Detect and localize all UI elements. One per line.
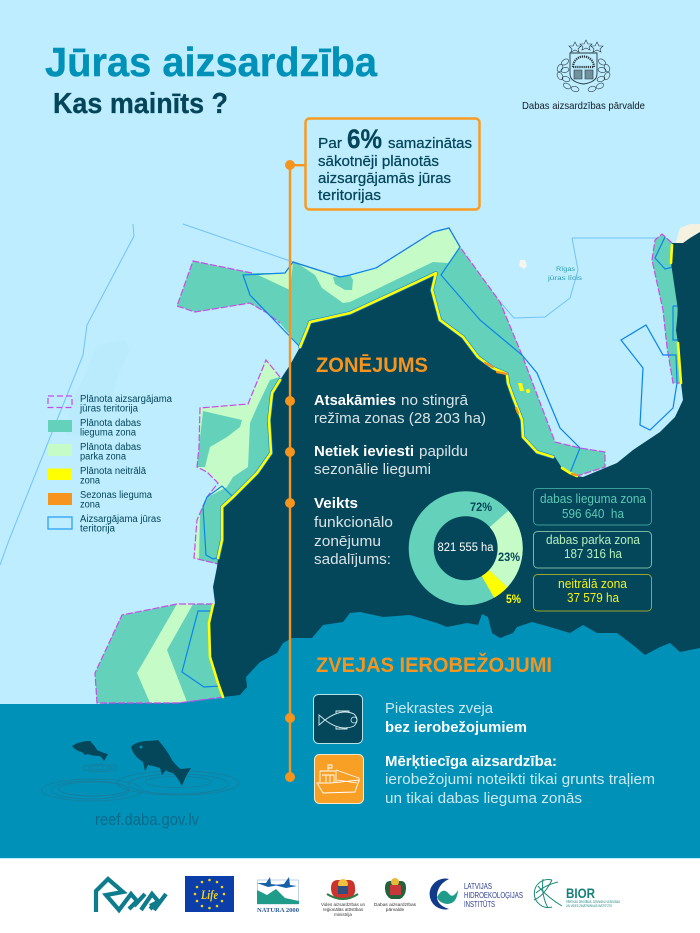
legend: Plānota dabas bbox=[80, 442, 141, 453]
logo: Latvian Institute of Aquatic Ecology: HIDROEKOLOĢIJAS bbox=[464, 891, 523, 900]
open sea band bbox=[0, 600, 700, 858]
logo: BIOR: BIOR bbox=[566, 885, 595, 901]
island bbox=[519, 260, 527, 269]
stat box: nature reserve zone: 596 640 ha bbox=[562, 507, 624, 521]
legend: zona bbox=[80, 476, 100, 486]
legend: Plānota neitrālā bbox=[80, 466, 146, 477]
map: neutral zone spots bbox=[518, 383, 530, 393]
callout: 6% reduction bbox=[306, 118, 480, 210]
callout: 6% reduction: 6% bbox=[347, 124, 382, 154]
map: dashed planned boundary bbox=[95, 228, 682, 703]
land mass bbox=[209, 232, 700, 697]
text: functional zoning: sadalījums: bbox=[314, 551, 391, 568]
legend: parka zona bbox=[80, 452, 126, 462]
timeline spine with dots bbox=[285, 160, 305, 782]
cream coast at north-east corner bbox=[675, 224, 700, 246]
text: coastal fishing: bez ierobežojumiem bbox=[385, 719, 527, 736]
legend: zona bbox=[80, 500, 100, 510]
heading: zoning: ZONĒJUMS bbox=[316, 354, 428, 377]
label: Gulf of Riga: jūras līcis bbox=[547, 275, 583, 282]
logo: ministry bbox=[321, 879, 365, 917]
stat box: neutral zone: 37 579 ha bbox=[567, 591, 619, 605]
stat box: nature park zone: 187 316 ha bbox=[564, 547, 622, 561]
map: neutral zone coast line bbox=[209, 245, 681, 697]
logo: nature protection board bbox=[374, 878, 417, 913]
logo: ministry: ministrija bbox=[334, 912, 352, 917]
text: functional zoning: Veikts bbox=[314, 495, 358, 512]
text: no additional seasonal restrictions: Netiek ieviesti bbox=[314, 443, 414, 460]
crest: nature protection board bbox=[556, 40, 611, 92]
map: west protected zone bbox=[194, 360, 300, 570]
donut chart: 72% bbox=[470, 500, 492, 514]
callout: 6% reduction: aizsargājamās jūras bbox=[318, 170, 451, 187]
legend: teritorija bbox=[80, 524, 115, 534]
text: exempt from strict regime: režīma zonas (28 203 ha) bbox=[314, 410, 486, 427]
logo: Latvian Institute of Aquatic Ecology: LATVIJAS bbox=[464, 882, 492, 891]
map: south protected zone bbox=[95, 604, 230, 703]
logo: ministry: reģionālās attīstības bbox=[323, 906, 364, 912]
text: no additional seasonal restrictions: papildu bbox=[419, 443, 468, 460]
legend bbox=[48, 394, 172, 534]
donut chart: 5% bbox=[506, 592, 521, 606]
faint seabed shape bbox=[65, 340, 130, 437]
map: protected area blue outlines bbox=[182, 228, 678, 687]
callout: 6% reduction: Par bbox=[318, 135, 342, 152]
map: north protected zone bbox=[177, 228, 605, 480]
text: targeted protection: un tikai dabas lieguma zonās bbox=[385, 790, 582, 807]
callout: 6% reduction: samazinātas bbox=[388, 135, 472, 152]
stat box: neutral zone: neitrālā zona bbox=[558, 577, 627, 591]
logo: BIOR bbox=[534, 879, 621, 908]
map: boundary lines in open sea bbox=[0, 224, 657, 565]
subtitle: Kas mainīts ? bbox=[53, 88, 228, 120]
legend: Plānota aizsargājama bbox=[80, 394, 172, 405]
logo: BIOR: PĀRTIKAS DROŠĪBAS, DZĪVNIEKU VESELĪBAS bbox=[566, 899, 621, 904]
legend: Plānota dabas bbox=[80, 418, 141, 429]
logo: Latvian Institute of Aquatic Ecology bbox=[430, 878, 523, 910]
donut chart bbox=[421, 500, 523, 606]
map: east protected zone bbox=[652, 234, 690, 390]
text: exempt from strict regime: Atsakāmies bbox=[314, 392, 396, 409]
label: Gulf of Riga bbox=[547, 266, 583, 282]
stat box: neutral zone bbox=[534, 574, 652, 611]
logo: Natura 2000: NATURA 2000 bbox=[257, 908, 299, 914]
text: no additional seasonal restrictions: sezonālie liegumi bbox=[314, 461, 431, 478]
text: functional zoning bbox=[314, 495, 393, 568]
text: targeted protection bbox=[385, 753, 655, 807]
callout: 6% reduction: teritorijas bbox=[318, 187, 381, 204]
text: functional zoning: zonējumu bbox=[314, 533, 381, 550]
icon: jumping fish with ripples bbox=[42, 740, 239, 801]
logo: EU LIFE bbox=[185, 876, 234, 912]
text: exempt from strict regime: no stingrā bbox=[401, 392, 469, 409]
label: Gulf of Riga: Rīgas bbox=[556, 266, 576, 273]
text: no additional seasonal restrictions bbox=[314, 443, 468, 478]
text: coastal fishing: Piekrastes zveja bbox=[385, 700, 494, 717]
text: exempt from strict regime bbox=[314, 392, 486, 427]
text: coastal fishing bbox=[385, 700, 527, 736]
stat box: nature park zone bbox=[534, 532, 652, 568]
logo: Reef bbox=[96, 879, 166, 912]
logo: nature protection board: pārvalde bbox=[386, 907, 405, 913]
icon: fishing boat bbox=[314, 754, 364, 804]
logo: ministry: Vides aizsardzības un bbox=[321, 902, 365, 907]
legend: jūras teritorija bbox=[79, 404, 138, 414]
website: reef.daba.gov.lv bbox=[95, 810, 199, 829]
logo: BIOR: UN VIDES ZINĀTNISKAIS INSTITŪTS bbox=[566, 904, 613, 908]
stat box: nature reserve zone: dabas lieguma zona bbox=[540, 492, 646, 506]
logo: Latvian Institute of Aquatic Ecology: INSTITŪTS bbox=[464, 900, 495, 909]
logo: EU LIFE: Life bbox=[200, 887, 218, 902]
stat box: nature park zone: dabas parka zona bbox=[546, 533, 640, 547]
stat box: nature reserve zone bbox=[534, 488, 652, 525]
legend: Aizsargājama jūras bbox=[80, 514, 161, 525]
title: Jūras aizsardzība bbox=[45, 39, 378, 85]
logo: Natura 2000 bbox=[257, 877, 299, 914]
donut chart: 821 555 ha bbox=[438, 542, 494, 554]
legend: Sezonas lieguma bbox=[80, 490, 152, 501]
logo: nature protection board: Dabas aizsardzības bbox=[374, 902, 417, 908]
donut chart: 23% bbox=[498, 550, 520, 564]
heading: fishing restrictions: ZVEJAS IEROBEŽOJUMI bbox=[316, 653, 552, 677]
text: targeted protection: ierobežojumi noteikti tikai grunts traļiem bbox=[385, 771, 655, 788]
icon: fish bbox=[314, 694, 362, 744]
organisation name: Dabas aizsardzības pārvalde bbox=[522, 100, 645, 112]
legend: lieguma zona bbox=[80, 428, 136, 438]
text: targeted protection: Mērķtiecīga aizsardzība: bbox=[385, 753, 557, 770]
callout: 6% reduction: sākotnēji plānotās bbox=[318, 153, 439, 170]
text: functional zoning: funkcionālo bbox=[314, 514, 393, 531]
